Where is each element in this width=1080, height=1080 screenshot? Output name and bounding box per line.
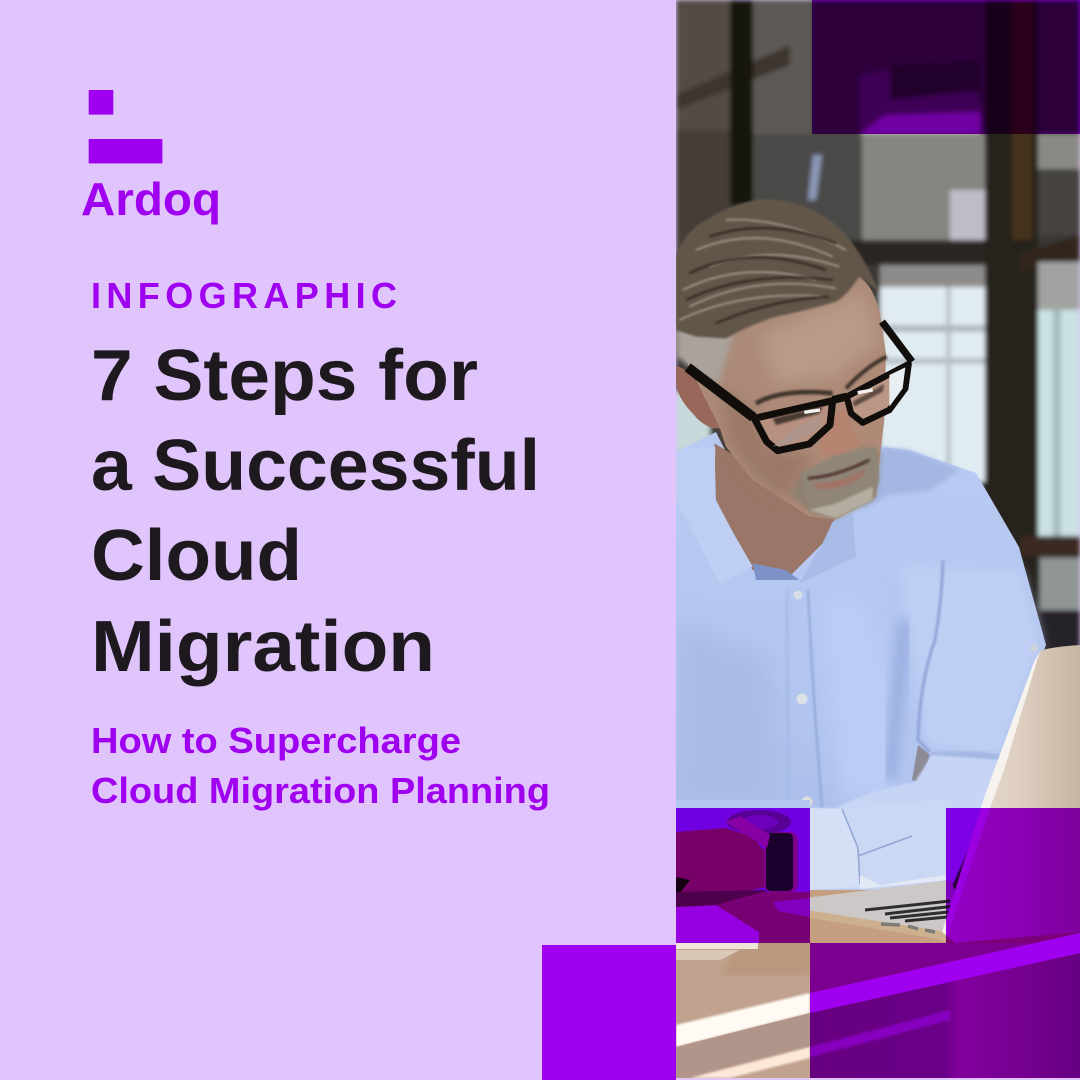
logo: Ardoq: Ardoq xyxy=(81,173,221,225)
collar xyxy=(676,447,753,583)
shirt xyxy=(676,432,1046,900)
solid square xyxy=(542,945,676,1080)
arm seam xyxy=(918,560,943,752)
laptop xyxy=(810,645,1080,943)
neck xyxy=(714,443,836,580)
sideburn xyxy=(676,327,733,383)
forearm xyxy=(808,755,1000,890)
overlay square: left of watch xyxy=(676,808,810,943)
stubble beard xyxy=(790,446,884,522)
mouth xyxy=(808,460,869,478)
head, in zoom coordinates xyxy=(676,199,912,583)
notepad xyxy=(676,905,759,943)
laptop lid xyxy=(942,645,1080,943)
title: a Successful xyxy=(91,426,540,506)
title: 7 Steps for xyxy=(91,336,478,416)
face xyxy=(683,273,886,519)
overlay square: top right xyxy=(812,0,1080,134)
title xyxy=(91,336,540,687)
ear xyxy=(676,366,721,428)
wrist, hand and watch xyxy=(676,800,810,943)
subtitle: How to Supercharge xyxy=(91,720,461,761)
table xyxy=(676,890,1080,1078)
subtitle: Cloud Migration Planning xyxy=(91,770,550,811)
eyebrow: INFOGRAPHIC: INFOGRAPHIC xyxy=(91,275,402,316)
glasses xyxy=(688,322,912,451)
elbow gap xyxy=(912,745,930,782)
subtitle xyxy=(91,720,550,811)
placket xyxy=(808,590,822,808)
sleeve cuff xyxy=(810,808,860,890)
overlay square: laptop lid xyxy=(946,808,1080,943)
title: Migration xyxy=(91,607,435,687)
logo: Ardoq xyxy=(81,90,221,225)
hair xyxy=(676,199,879,338)
title: Cloud xyxy=(91,516,302,596)
eyebrows xyxy=(756,392,833,403)
photo: man at laptop xyxy=(676,0,1080,1078)
office background xyxy=(676,0,1080,890)
shirt buttons xyxy=(794,590,802,600)
overlay square: table xyxy=(810,943,1080,1078)
